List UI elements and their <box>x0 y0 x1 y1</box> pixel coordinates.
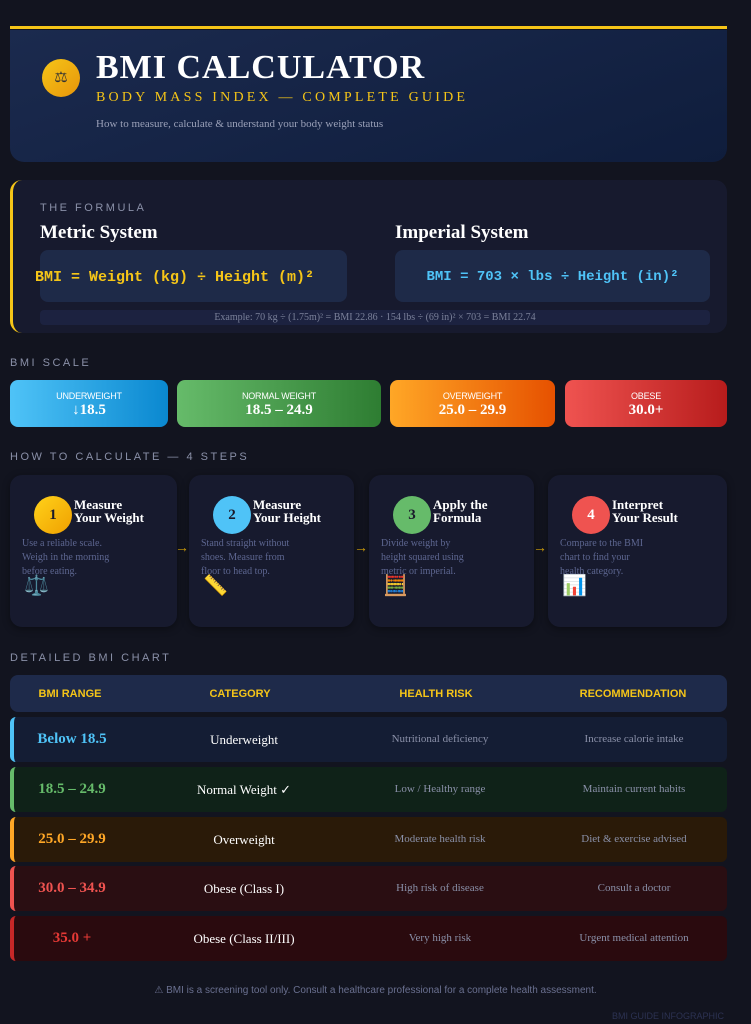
subtitle: BODY MASS INDEX — COMPLETE GUIDE <box>96 90 468 105</box>
row: underweight: Below 18.5 <box>37 731 107 747</box>
imperial heading: Imperial System <box>395 222 529 243</box>
step 1: Weigh in the morning <box>22 552 109 563</box>
row: underweight <box>10 717 727 762</box>
header card <box>10 30 727 162</box>
step 1 <box>10 475 177 627</box>
step 3 <box>369 475 534 627</box>
row: obese I: 30.0 – 34.9 <box>38 880 106 896</box>
scale: normal <box>177 380 381 427</box>
row: normal: Normal Weight ✓ <box>197 782 291 797</box>
description: How to measure, calculate & understand your body weight status <box>96 118 383 130</box>
metric heading: Metric System <box>40 222 158 243</box>
arrow 2: → <box>354 541 368 556</box>
row: obese I: High risk of disease <box>396 882 484 894</box>
imperial formula box: BMI = 703 × lbs ÷ Height (in)² <box>426 269 679 285</box>
scale: obese: OBESE <box>631 391 661 401</box>
row: obese II: 35.0 + <box>53 930 91 946</box>
scale: normal: 18.5 – 24.9 <box>245 402 313 418</box>
step 2: floor to head top. <box>201 566 270 577</box>
row: overweight: Overweight <box>213 832 275 847</box>
row: obese II: Urgent medical attention <box>579 932 689 944</box>
row: obese I: Obese (Class I) <box>204 881 284 896</box>
formula label: THE FORMULA <box>40 202 146 214</box>
scale: overweight: OVERWEIGHT <box>443 391 502 401</box>
step 1: Measure <box>74 497 122 512</box>
step 3: Apply the <box>433 497 488 512</box>
top gold line <box>10 26 727 29</box>
row: normal: 18.5 – 24.9 <box>38 781 106 797</box>
scale: underweight: UNDERWEIGHT <box>56 391 122 401</box>
step 1: Use a reliable scale. <box>22 538 102 549</box>
step 3: height squared using <box>381 552 464 563</box>
step 2: 2 <box>228 507 236 523</box>
scale: overweight <box>390 380 555 427</box>
step 2 <box>189 475 354 627</box>
row: obese II: Very high risk <box>409 932 471 944</box>
heading: BMI scale: BMI SCALE <box>10 357 91 369</box>
row: obese II: Obese (Class II/III) <box>193 931 295 946</box>
row: normal <box>10 767 727 812</box>
table header: RECOMMENDATION <box>580 688 686 700</box>
row: overweight <box>10 817 727 862</box>
step 4: Your Result <box>612 510 678 525</box>
icon: scales: ⚖ <box>54 70 68 86</box>
step 1: ⚖️ <box>24 575 49 597</box>
scale: underweight: ↓18.5 <box>72 402 106 418</box>
step 1: 1 <box>49 507 57 523</box>
table header: BMI RANGE <box>39 688 101 700</box>
row: underweight: Underweight <box>210 732 278 747</box>
row: overweight: 25.0 – 29.9 <box>38 831 106 847</box>
scale: overweight: 25.0 – 29.9 <box>439 402 506 418</box>
arrow 3: → <box>533 541 547 556</box>
step 2: Stand straight without <box>201 538 289 549</box>
scale: normal: NORMAL WEIGHT <box>242 391 316 401</box>
step 2: Measure <box>253 497 301 512</box>
step 4: Interpret <box>612 497 663 512</box>
example <box>40 310 710 325</box>
step 3: Divide weight by <box>381 538 450 549</box>
step 4: 📊 <box>562 575 587 597</box>
step 4: health category. <box>560 566 623 577</box>
row: normal: Low / Healthy range <box>395 783 485 795</box>
step 1: Your Weight <box>74 510 144 525</box>
step 3: 3 <box>408 507 416 523</box>
step 4: chart to find your <box>560 552 630 563</box>
row: normal: Maintain current habits <box>583 783 685 795</box>
step 2: shoes. Measure from <box>201 552 285 563</box>
step 3: Formula <box>433 510 481 525</box>
table header: CATEGORY <box>209 688 271 700</box>
step 1: before eating. <box>22 566 77 577</box>
panel: formula <box>10 180 727 333</box>
scale: obese: 30.0+ <box>629 402 663 418</box>
title: BMI CALCULATOR <box>96 49 425 86</box>
row: overweight: Diet & exercise advised <box>581 833 687 845</box>
step 2: Your Height <box>253 510 321 525</box>
scale: underweight <box>10 380 168 427</box>
arrow 1: → <box>175 541 189 556</box>
row: underweight: Nutritional deficiency <box>392 733 488 745</box>
step 4: 4 <box>587 507 595 523</box>
example: Example: 70 kg ÷ (1.75m)² = BMI 22.86 · 154 lbs ÷ (69 in)² × 703 = BMI 22.74 <box>214 312 536 323</box>
step 2: 📏 <box>203 575 228 597</box>
imperial formula box <box>395 250 710 302</box>
step 4: Compare to the BMI <box>560 538 643 549</box>
heading: chart: DETAILED BMI CHART <box>10 652 171 664</box>
step 3: 🧮 <box>383 575 408 597</box>
row: underweight: Increase calorie intake <box>585 733 683 745</box>
row: obese I <box>10 866 727 911</box>
metric formula box <box>40 250 347 302</box>
table header: HEALTH RISK <box>399 688 473 700</box>
scale: obese <box>565 380 727 427</box>
row: overweight: Moderate health risk <box>394 833 486 845</box>
table header <box>10 675 727 712</box>
row: obese I: Consult a doctor <box>598 882 670 894</box>
heading: steps: HOW TO CALCULATE — 4 STEPS <box>10 451 249 463</box>
icon: scales <box>42 59 80 97</box>
step 3: metric or imperial. <box>381 566 456 577</box>
footer note: ⚠ BMI is a screening tool only. Consult a healthcare professional for a complete health assessment. <box>154 985 597 996</box>
metric formula: BMI = Weight (kg) ÷ Height (m)² <box>35 269 314 286</box>
step 4 <box>548 475 727 627</box>
footer credit: BMI GUIDE INFOGRAPHIC <box>612 1011 724 1021</box>
row: obese II <box>10 916 727 961</box>
